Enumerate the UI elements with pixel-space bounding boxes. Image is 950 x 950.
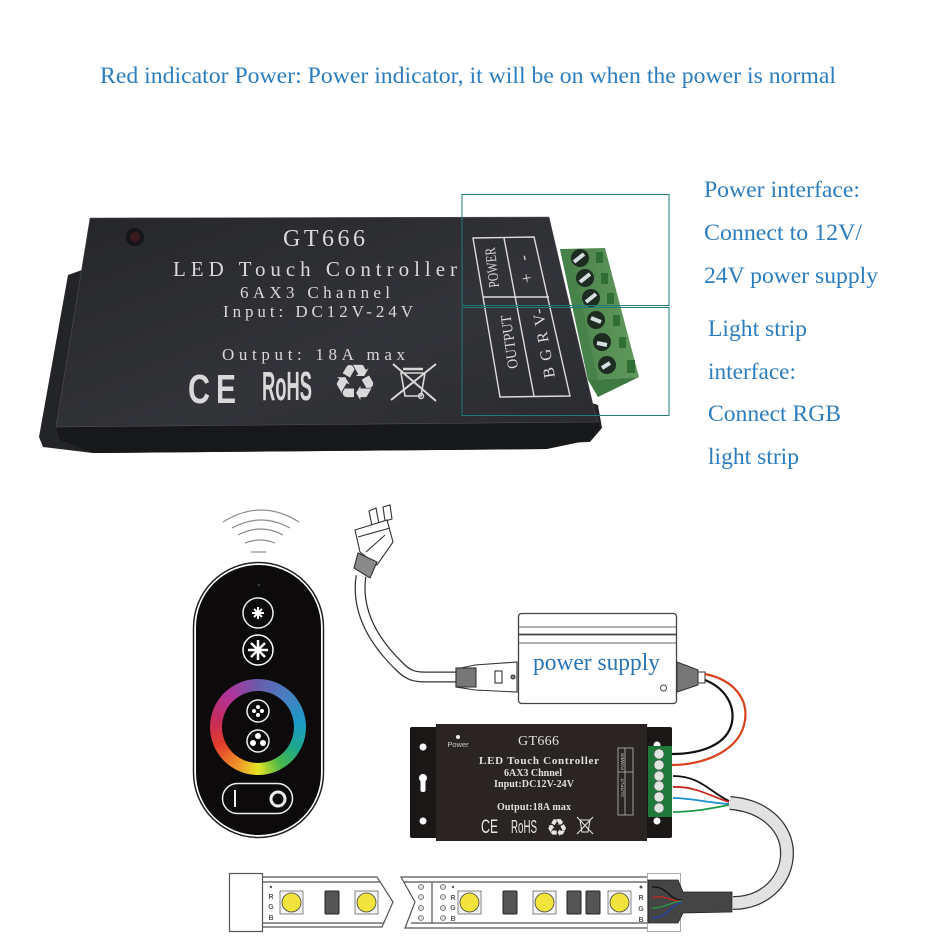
icon: wireless signal arcs (223, 510, 299, 552)
small logos: ♻ (546, 814, 568, 842)
red indicator LED (126, 228, 144, 246)
button: dim up (243, 635, 273, 665)
flexible strip cable (730, 803, 787, 903)
small terminal label: OUTPUT (620, 778, 625, 797)
controller printed text (173, 226, 457, 364)
small terminal label: POWER (620, 752, 625, 770)
small controller text: LED Touch Controller (479, 755, 599, 767)
solder pads (418, 884, 446, 920)
controller printed text: 6AX3 Channel (240, 283, 390, 302)
output connector (677, 662, 705, 692)
title: red indicator note: Red indicator Power: Power indicator, it will be on when the power is normal (100, 63, 836, 88)
controller top face (56, 217, 598, 427)
text: light strip interface: interface: (708, 359, 796, 384)
small controller text: 6AX3 Chnnel (504, 768, 562, 779)
strip connector (648, 874, 732, 932)
text: light strip interface (708, 316, 841, 469)
button: dim down (243, 598, 273, 628)
mounting holes (419, 742, 660, 824)
terminal labels (483, 247, 559, 379)
button: colour mode small (247, 700, 269, 722)
strip LEDs (280, 891, 631, 914)
highlight box: power terminals (462, 194, 669, 306)
LED strip (230, 874, 732, 932)
input connector (456, 662, 517, 692)
controller printed text: Input: DC12V-24V (223, 302, 414, 321)
green terminal block (560, 248, 639, 397)
strip channel labels: B (450, 916, 456, 923)
terminal labels: + - (513, 253, 537, 285)
small controller text: GT666 (518, 734, 559, 749)
controller flange and front (39, 240, 602, 453)
controller printed text: Output: 18A max (222, 345, 406, 364)
terminal label box (473, 237, 570, 397)
controller printed text: LED Touch Controller (173, 257, 457, 281)
cable (360, 576, 456, 677)
remote control (194, 562, 324, 838)
small logos: RoHS (511, 817, 537, 837)
strip channel labels: B (638, 917, 644, 924)
small green terminal (648, 746, 672, 817)
on off switch (222, 784, 292, 814)
CE mark: C (188, 366, 210, 412)
terminal labels: POWER (483, 247, 503, 288)
CE mark: E (216, 366, 236, 412)
crossed bin icon (391, 364, 436, 401)
strip channel labels: G (638, 906, 644, 913)
wires: power supply to controller (672, 674, 745, 765)
terminal labels: OUTPUT (499, 314, 522, 370)
small controller text: Output:18A max (497, 802, 571, 813)
strip channel labels: G (450, 905, 456, 912)
text: power interface: Power interface: (704, 177, 860, 202)
CE mark (188, 366, 236, 412)
photo: GT666 controller: RoHS (262, 363, 312, 409)
terminal labels: B G R V- (530, 307, 559, 379)
text: light strip interface: light strip (708, 444, 799, 469)
strip channel labels: R (450, 895, 456, 902)
controller printed text: GT666 (283, 226, 365, 252)
strip outline left (230, 874, 393, 932)
power LED label: Power (447, 740, 469, 749)
power supply body (518, 614, 676, 704)
strip channel labels: B (268, 915, 274, 922)
strip channel labels: R (268, 894, 274, 901)
plug (354, 505, 393, 578)
small controller text (479, 734, 599, 813)
power supply label: power supply (533, 650, 660, 676)
button: colour mode large (247, 730, 269, 752)
strip channel labels: R (638, 895, 644, 902)
strip channel labels (268, 886, 644, 924)
photo: GT666 controller (39, 217, 639, 453)
text: power interface (704, 177, 879, 288)
text: power interface: Connect to 12V/ (704, 220, 863, 245)
power LED label (447, 735, 469, 749)
strip resistors (325, 891, 600, 914)
strip channel labels: G (268, 904, 274, 911)
RGB colour ring (210, 679, 306, 775)
small controller text: Input:DC12V-24V (494, 779, 575, 790)
text: light strip interface: Connect RGB (708, 401, 841, 426)
small terminal label (618, 748, 633, 815)
text: power interface: 24V power supply (704, 263, 879, 288)
recycle icon: ♻ (333, 354, 377, 412)
text: light strip interface: Light strip (708, 316, 807, 341)
wires: controller to strip (673, 776, 729, 812)
remote body (194, 562, 324, 838)
highlight box: output terminals (462, 308, 669, 416)
strip outline right (401, 877, 650, 928)
small logos: E (490, 817, 498, 838)
small logos (481, 814, 593, 842)
power supply (456, 614, 705, 704)
small controller body (410, 724, 672, 841)
small logos: C (481, 817, 490, 838)
small controller (410, 724, 672, 842)
mains plug and cable (354, 505, 456, 677)
